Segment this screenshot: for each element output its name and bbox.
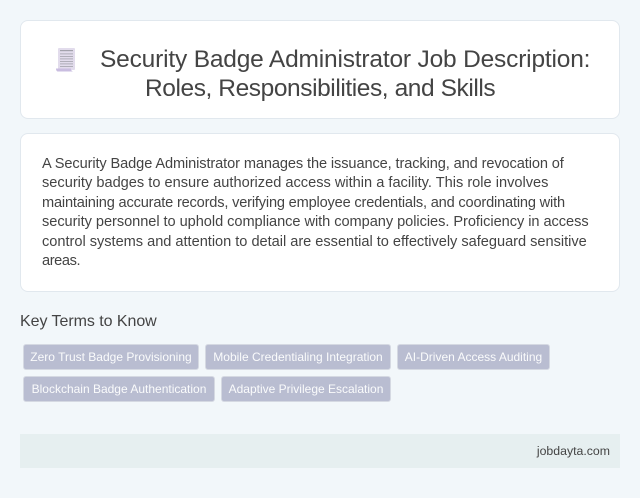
text block: description: areas. <box>42 253 80 269</box>
text block: description: security personnel to uphold compliance with company policies. Proficiency in access <box>42 214 589 230</box>
text block: description <box>42 156 589 269</box>
tag <box>23 376 215 402</box>
tag: Zero Trust Badge Provisioning <box>30 350 192 364</box>
text block: description: maintaining accurate records, verifying employee credentials, and coordinating with <box>42 195 565 211</box>
text block: description: A Security Badge Administrator manages the issuance, tracking, and revocation of <box>42 156 564 172</box>
tag list <box>23 344 550 402</box>
tag: Adaptive Privilege Escalation <box>229 382 383 396</box>
text block: description: control systems and attention to detail are essential to effectively safeguard sensitive <box>42 234 587 250</box>
tag <box>23 344 199 370</box>
heading: Roles, Responsibilities, and Skills <box>145 75 495 102</box>
icon: document scroll <box>56 48 75 72</box>
heading: Security Badge Administrator Job Description: <box>100 46 590 73</box>
footer bar <box>20 434 620 468</box>
tag <box>397 344 550 370</box>
tag: Blockchain Badge Authentication <box>32 382 206 396</box>
tag <box>205 344 391 370</box>
text block: description: security badges to ensure authorized access within a facility. This role involves <box>42 175 548 191</box>
tag: Mobile Credentialing Integration <box>213 350 383 364</box>
panel: description <box>20 133 620 292</box>
heading <box>100 46 590 102</box>
tag: AI-Driven Access Auditing <box>405 350 542 364</box>
panel: title card <box>20 20 620 119</box>
footer source text: jobdayta.com <box>537 444 610 458</box>
heading: key terms: Key Terms to Know <box>20 313 157 330</box>
tag <box>221 376 391 402</box>
